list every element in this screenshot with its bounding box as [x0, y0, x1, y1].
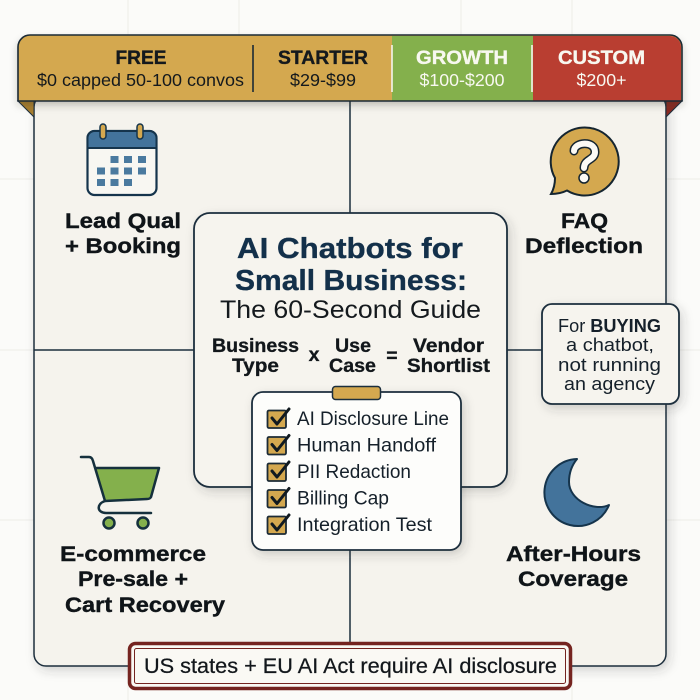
checklist items — [268, 408, 449, 536]
label: faq deflection: Deflection — [525, 234, 643, 258]
subtitle: The 60-Second Guide — [220, 296, 481, 324]
panel: checklist — [252, 386, 461, 550]
checklist items: Billing Cap — [297, 488, 389, 510]
tier: growth — [416, 48, 508, 90]
callout: for buying — [542, 304, 679, 404]
callout: for buying: an agency — [564, 374, 655, 394]
callout: for buying: not running — [558, 355, 661, 375]
formula: Use — [335, 335, 371, 357]
label: e-commerce: E-commerce — [60, 542, 206, 566]
formula: Type — [232, 355, 279, 377]
panel: central guide card — [194, 213, 507, 487]
tier: free: $0 capped 50-100 convos — [37, 70, 244, 90]
tier: starter: STARTER — [278, 48, 368, 69]
checklist items: PII Redaction — [297, 461, 411, 483]
label: e-commerce: Pre-sale + — [78, 567, 188, 591]
formula: Business — [212, 335, 299, 357]
tier: growth: GROWTH — [416, 48, 508, 69]
label: faq deflection — [525, 209, 643, 258]
legal banner: US states + EU AI Act require AI disclosure — [144, 654, 557, 678]
label: lead qual: Lead Qual — [65, 209, 181, 233]
tier: growth: $100-$200 — [420, 70, 505, 90]
tier: free: FREE — [116, 48, 166, 69]
label: e-commerce: Cart Recovery — [65, 593, 225, 617]
tier: custom — [558, 48, 645, 90]
tier: starter: $29-$99 — [290, 70, 356, 90]
clip — [332, 386, 380, 400]
pricing banner — [18, 35, 682, 117]
icon: question bubble — [551, 127, 619, 195]
label: after-hours: After-Hours — [506, 542, 641, 566]
formula: Case — [329, 355, 376, 377]
formula: = — [386, 345, 398, 367]
checklist items: AI Disclosure Line — [297, 408, 449, 430]
checklist items: Human Handoff — [297, 434, 437, 456]
formula — [212, 335, 491, 377]
icon: shopping cart — [81, 457, 159, 528]
title — [235, 233, 467, 297]
callout: for buying: For BUYING — [558, 316, 661, 336]
icon: crescent moon — [544, 459, 609, 526]
tier: custom: $200+ — [576, 70, 626, 90]
title: Small Business: — [235, 265, 467, 297]
label: faq deflection: FAQ — [561, 209, 608, 233]
checklist items: Integration Test — [297, 514, 433, 536]
icon: calendar — [88, 124, 156, 195]
formula: Shortlist — [407, 355, 491, 377]
formula: x — [309, 344, 320, 366]
label: lead qual: + Booking — [65, 234, 181, 258]
tier: free — [37, 48, 244, 90]
label: after-hours: Coverage — [518, 567, 628, 591]
legal banner — [130, 644, 570, 688]
tier: starter — [278, 48, 368, 90]
label: after-hours — [506, 542, 641, 591]
callout: for buying: a chatbot, — [566, 335, 654, 355]
label: e-commerce — [60, 542, 225, 617]
formula: Vendor — [413, 335, 484, 357]
tier: custom: CUSTOM — [558, 48, 645, 69]
label: lead qual — [65, 209, 181, 258]
panel: main board — [34, 95, 666, 666]
title: AI Chatbots for — [237, 233, 463, 265]
